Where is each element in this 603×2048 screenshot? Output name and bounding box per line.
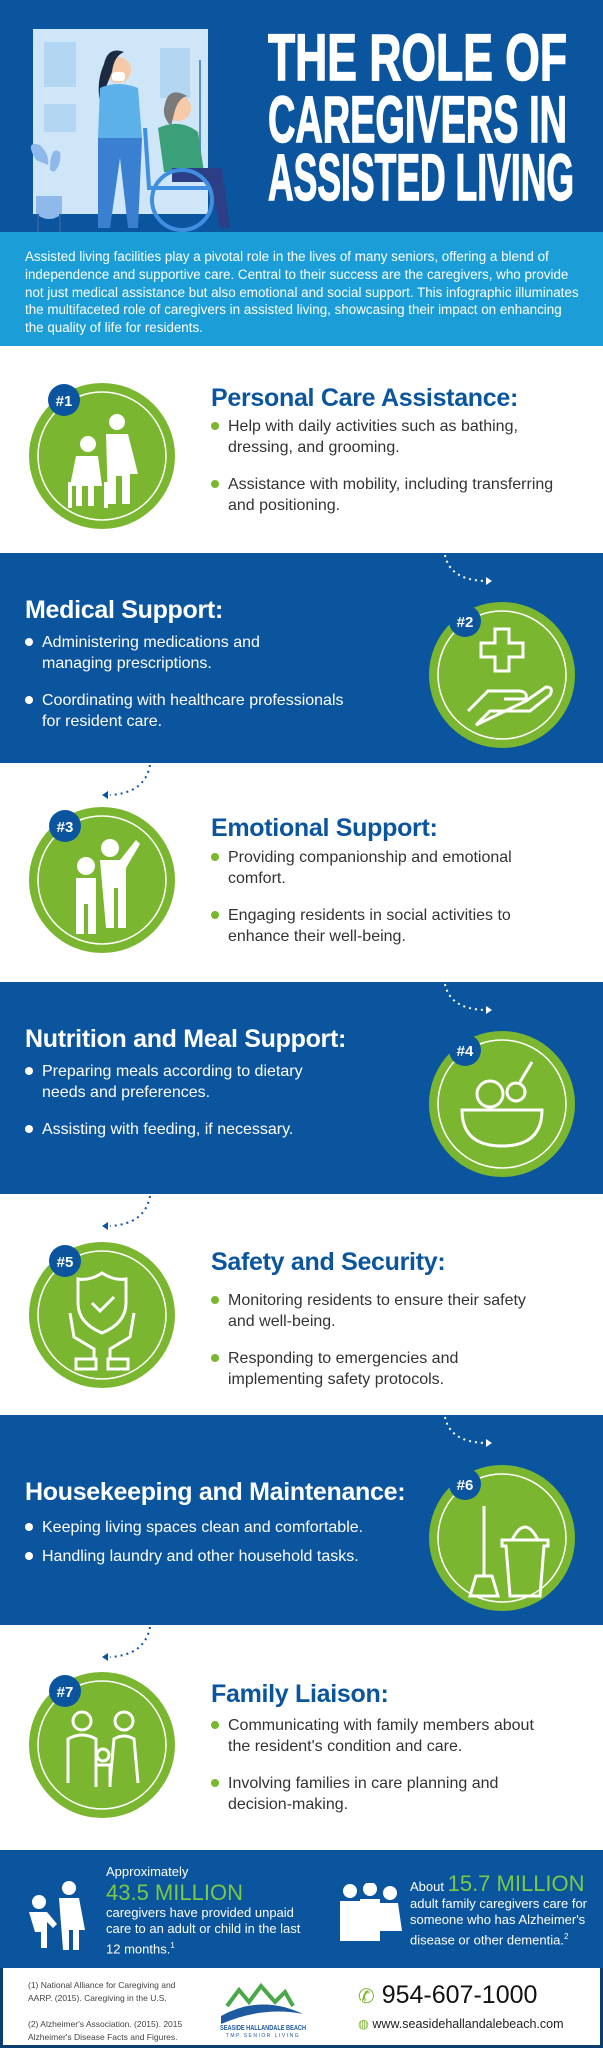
title [268, 20, 574, 210]
intro text: Assisted living facilities play a pivotal role in the lives of many seniors, offering a blend of independence and supportive care. Central to their success are the caregivers, who provide not just medical assistance but also emotional and social support. This infographic illuminates the multifaceted role of caregivers in assisted living, showcasing their impact on enhancing the quality of life for residents. [25, 249, 579, 335]
panel: nutrition [0, 982, 603, 1194]
bullets: Assistance with mobility, including transferring and positioning. [228, 476, 553, 514]
icon: circle 6 [429, 1465, 575, 1611]
bullets: Preparing meals according to dietary needs and preferences. [42, 1063, 303, 1101]
contact: ◍ www.seasidehallandalebeach.com [358, 2017, 563, 2031]
heading: Housekeeping and Maintenance: [25, 1478, 405, 1506]
bullets: Coordinating with healthcare professionals for resident care. [42, 692, 344, 730]
panel: medical support [0, 553, 603, 763]
references: (2) Alzheimer's Association. (2015). 2015 Alzheimer's Disease Facts and Figures. [28, 2019, 182, 2042]
icon: circle 5: #5 [57, 1254, 73, 1271]
bullets: Monitoring residents to ensure their safety and well-being. [228, 1292, 526, 1330]
bullets [211, 1717, 534, 1813]
panel: housekeeping [0, 1415, 603, 1625]
heading: Nutrition and Meal Support: [25, 1025, 346, 1053]
bullets [25, 634, 344, 730]
contact [358, 1981, 563, 2031]
icon: circle 3 [29, 807, 175, 953]
contact: ✆ 954-607-1000 [358, 1981, 537, 2009]
stats band [0, 1850, 603, 1968]
arrow [102, 1626, 151, 1661]
panel: emotional support [29, 764, 512, 953]
icon: circle 1 [29, 383, 175, 529]
panel: safety [29, 1196, 526, 1388]
heading: Personal Care Assistance: [211, 384, 518, 412]
stat 2 text: About 15.7 MILLION [410, 1871, 585, 1896]
bullets: Responding to emergencies and implementing safety protocols. [228, 1350, 458, 1388]
stat 1 text: Approximately caregivers have provided unpaid care to an adult or child in the last 12 months.1 [106, 1864, 300, 1956]
references: (1) National Alliance for Caregiving and AARP. (2015). Caregiving in the U.S. [28, 1980, 175, 2003]
icon: family stat [340, 1883, 402, 1941]
intro text [0, 232, 603, 346]
icon: caregiver stat [29, 1881, 85, 1950]
header [0, 0, 603, 232]
footer [0, 1968, 603, 2048]
heading: Safety and Security: [211, 1248, 445, 1276]
bullets: Help with daily activities such as bathing, dressing, and grooming. [228, 418, 518, 456]
icon: circle 6: #6 [457, 1477, 473, 1494]
bullets [25, 1519, 363, 1565]
stat 2 text: adult family caregivers care for someone who has Alzheimer's disease or other dementia.2 [410, 1896, 587, 1947]
logo [220, 1982, 306, 2038]
arrow [444, 1416, 492, 1447]
bullets [211, 849, 512, 945]
icon: circle 7 [29, 1672, 175, 1818]
icon: circle 3: #3 [57, 819, 73, 836]
icon: circle 7: #7 [57, 1684, 73, 1701]
icon: circle 4 [429, 1031, 575, 1177]
bullets: Engaging residents in social activities to enhance their well-being. [228, 907, 511, 945]
bullets [25, 1063, 303, 1138]
stat 1 text: 43.5 MILLION [106, 1880, 243, 1904]
arrow [102, 764, 151, 799]
arrow [444, 554, 492, 585]
bullets: Handling laundry and other household tasks. [42, 1548, 359, 1565]
bullets: Providing companionship and emotional comfort. [228, 849, 512, 887]
references [28, 1980, 182, 2042]
arrow [444, 984, 492, 1014]
bullets: Communicating with family members about the resident's condition and care. [228, 1717, 534, 1755]
arrow [102, 1196, 151, 1230]
icon: circle 2 [429, 602, 575, 748]
panel: family liaison [29, 1626, 534, 1818]
icon: circle 4: #4 [457, 1043, 474, 1060]
heading: Emotional Support: [211, 814, 438, 842]
bullets: Administering medications and managing prescriptions. [42, 634, 260, 672]
icon: circle 2: #2 [457, 614, 473, 631]
bullets: Involving families in care planning and decision-making. [228, 1775, 498, 1813]
panel: personal care [29, 383, 553, 529]
heading: Family Liaison: [211, 1680, 388, 1708]
bullets: Assisting with feeding, if necessary. [42, 1121, 293, 1138]
illustration: caregiver pushing wheelchair [30, 29, 230, 232]
heading: Medical Support: [25, 596, 223, 624]
icon: circle 5 [29, 1242, 175, 1388]
icon: circle 1: #1 [56, 393, 72, 410]
bullets: Keeping living spaces clean and comfortable. [42, 1519, 363, 1536]
bullets [211, 1292, 526, 1388]
stat 2 text [410, 1871, 587, 1947]
bullets [211, 418, 553, 514]
